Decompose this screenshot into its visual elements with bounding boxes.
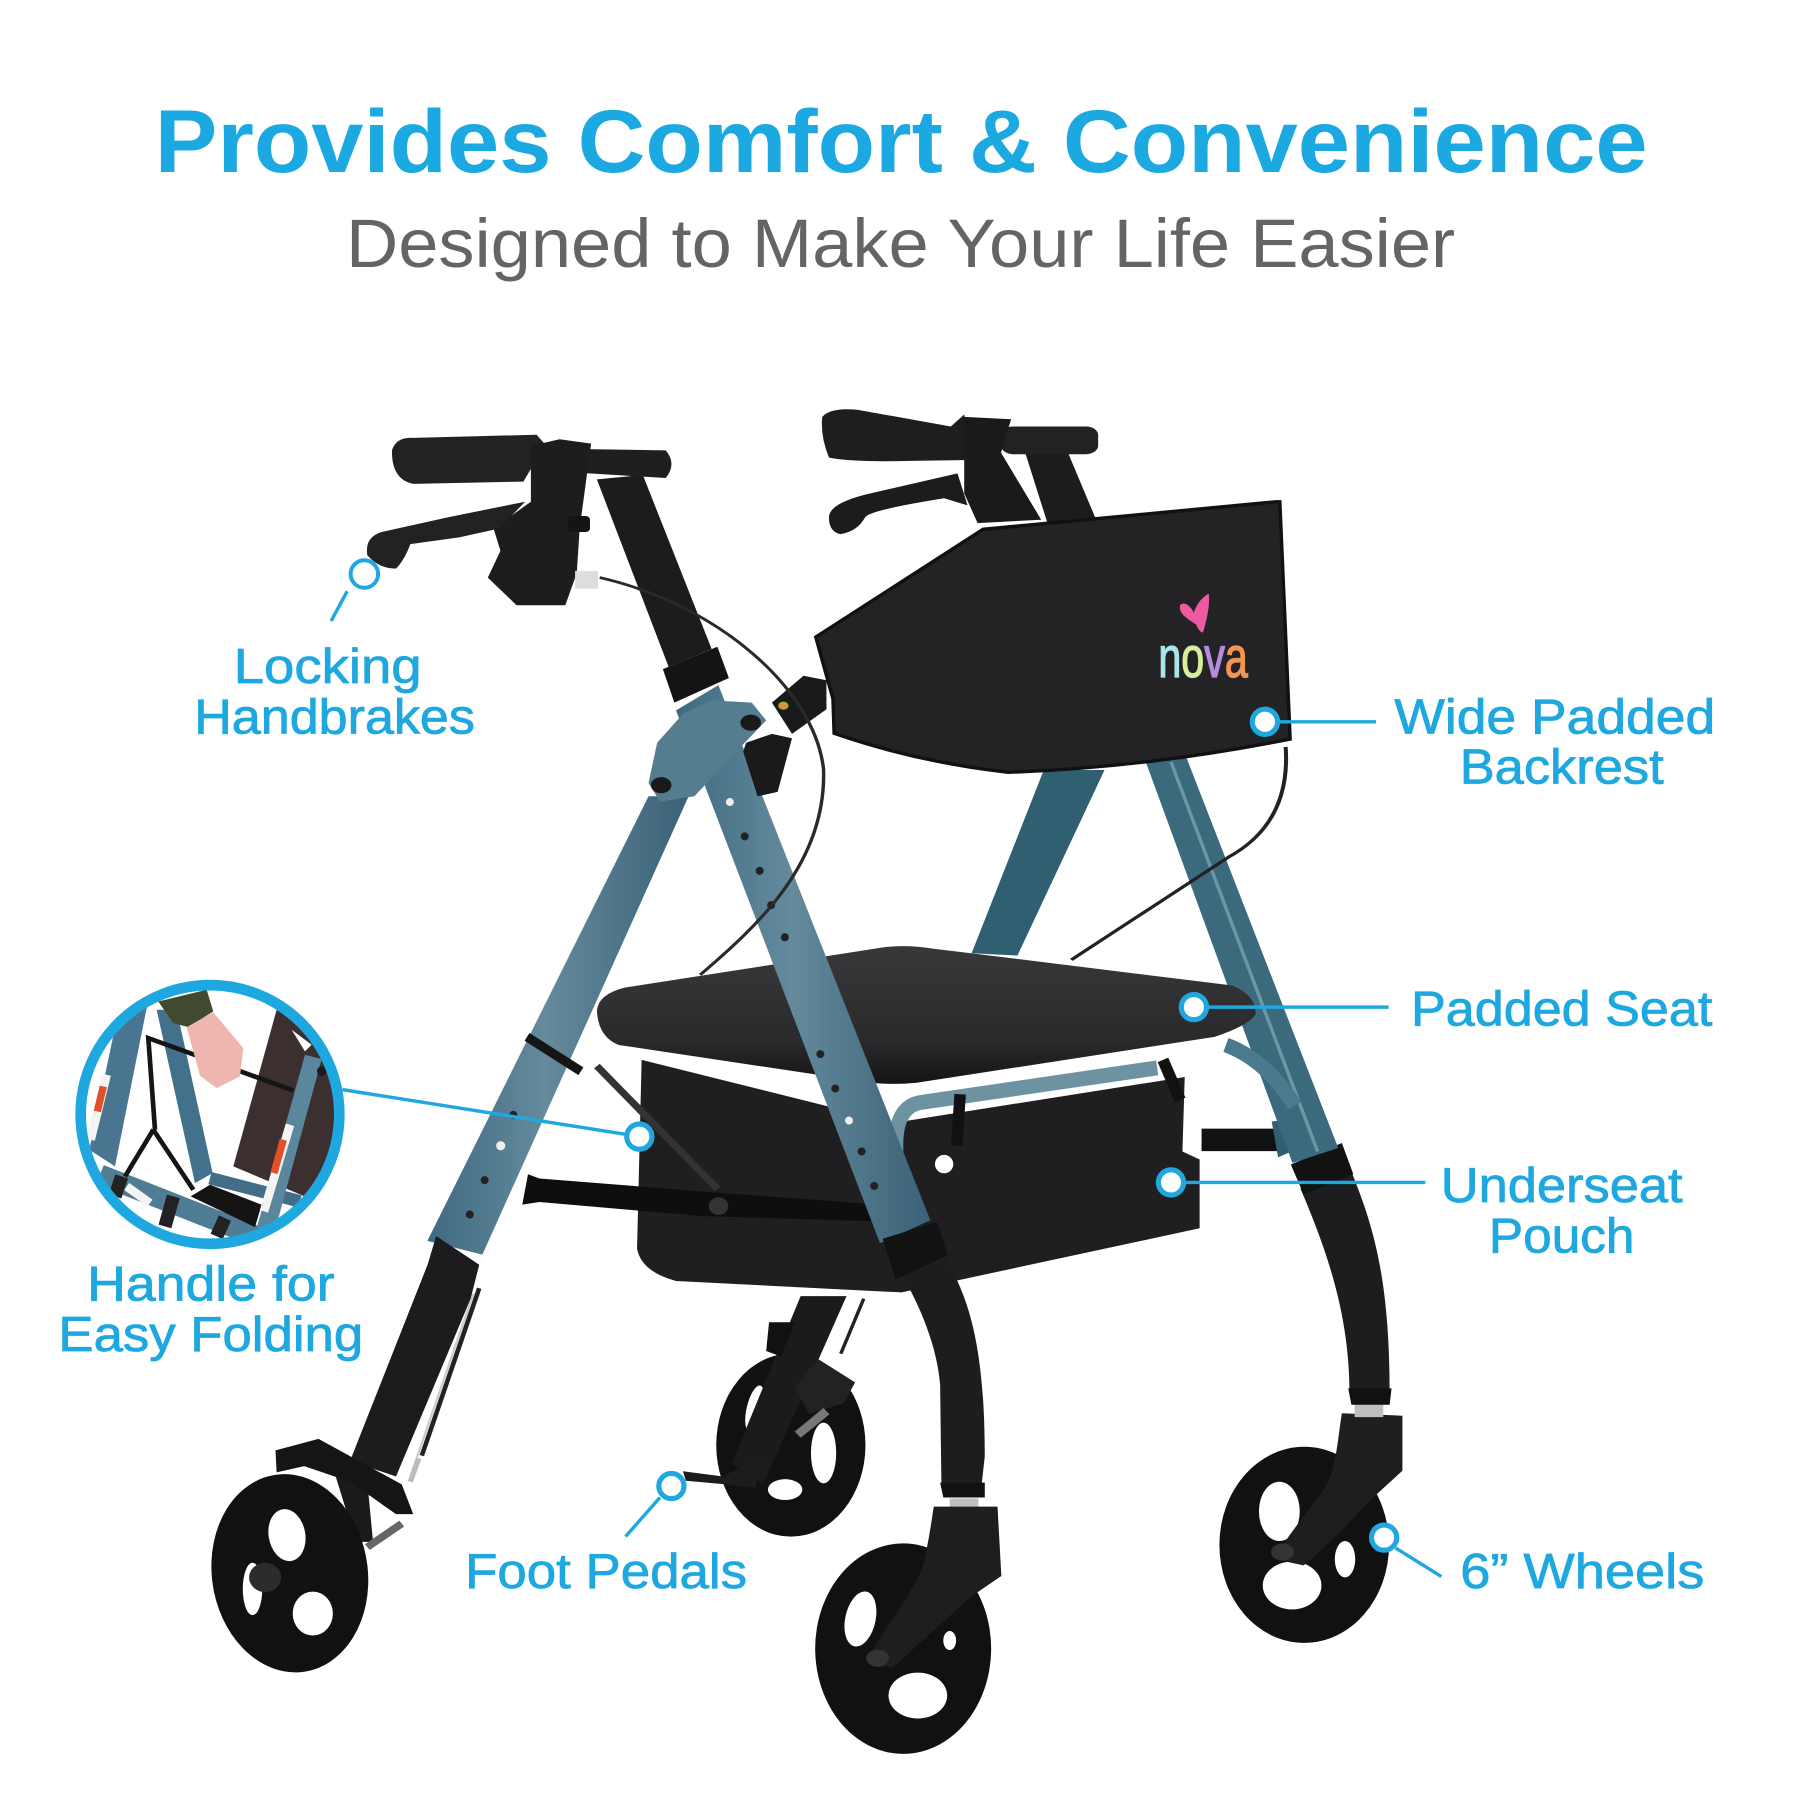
inset straps [115,1176,225,1236]
walker product illustration [201,409,1402,1754]
front brake cable [600,578,824,975]
front pivot bracket [649,676,826,802]
rear right tube [1146,756,1338,1163]
nova logo [1158,594,1248,690]
front right tube [676,685,930,1243]
rear left tube [972,770,1105,956]
callout: underseat pouch: Pouch [1489,1208,1634,1263]
callout: 6 inch wheels [1371,1525,1704,1599]
callout: 6 inch wheels: 6” Wheels [1460,1544,1704,1599]
callout: wide padded backrest [1252,689,1715,795]
callout: wide padded backrest: Backrest [1460,740,1664,795]
callout: locking handbrakes: Locking [234,639,422,694]
inset black tray [191,1185,262,1227]
left folding bar [522,1066,878,1221]
inset folding handle [125,1038,293,1190]
callout: handle for easy folding: Easy Folding [58,1307,363,1362]
right handle [822,409,1098,534]
rear left wheel and leg [683,1296,865,1537]
subtitle: Designed to Make Your Life Easier [346,205,1455,282]
callout: handle for easy folding: Handle for [87,1256,335,1311]
title: Provides Comfort & Convenience [155,91,1648,191]
callout: padded seat: Padded Seat [1411,981,1713,1036]
under-seat frame tubes [896,1045,1295,1173]
front left tube [427,796,689,1255]
front right tube holes [712,760,878,1190]
front left leg and wheel [201,1236,479,1680]
callout: underseat pouch: Underseat [1441,1158,1683,1213]
rear right leg and wheel [1202,1117,1402,1643]
padded seat [597,946,1256,1084]
nova logo: nova [1158,626,1248,690]
inset frame tubes [89,1005,326,1236]
rear brake cable [1071,747,1286,960]
inset stickers [91,1075,290,1211]
callout: foot pedals: Foot Pedals [465,1544,747,1599]
callout: wide padded backrest: Wide Padded [1394,689,1715,744]
inset photo: folding handle [73,976,347,1253]
inset red warning marks [97,1086,283,1173]
inset hand [187,1012,243,1088]
inset sleeve [158,990,213,1027]
callout: handle for easy folding [58,1090,652,1362]
left handle, brake lever and stem [367,435,729,703]
front right leg and wheel [815,1222,1001,1754]
callout: foot pedals [465,1473,747,1599]
callout: padded seat [1181,981,1713,1036]
inset background panel [233,1010,334,1196]
backrest [816,502,1290,772]
callout: locking handbrakes [194,560,475,744]
callout: locking handbrakes: Handbrakes [194,689,475,744]
front left tube holes and strap [466,1037,581,1219]
inset white gap [292,1030,312,1051]
underseat pouch [637,1060,1200,1292]
callout: underseat pouch [1158,1158,1683,1263]
